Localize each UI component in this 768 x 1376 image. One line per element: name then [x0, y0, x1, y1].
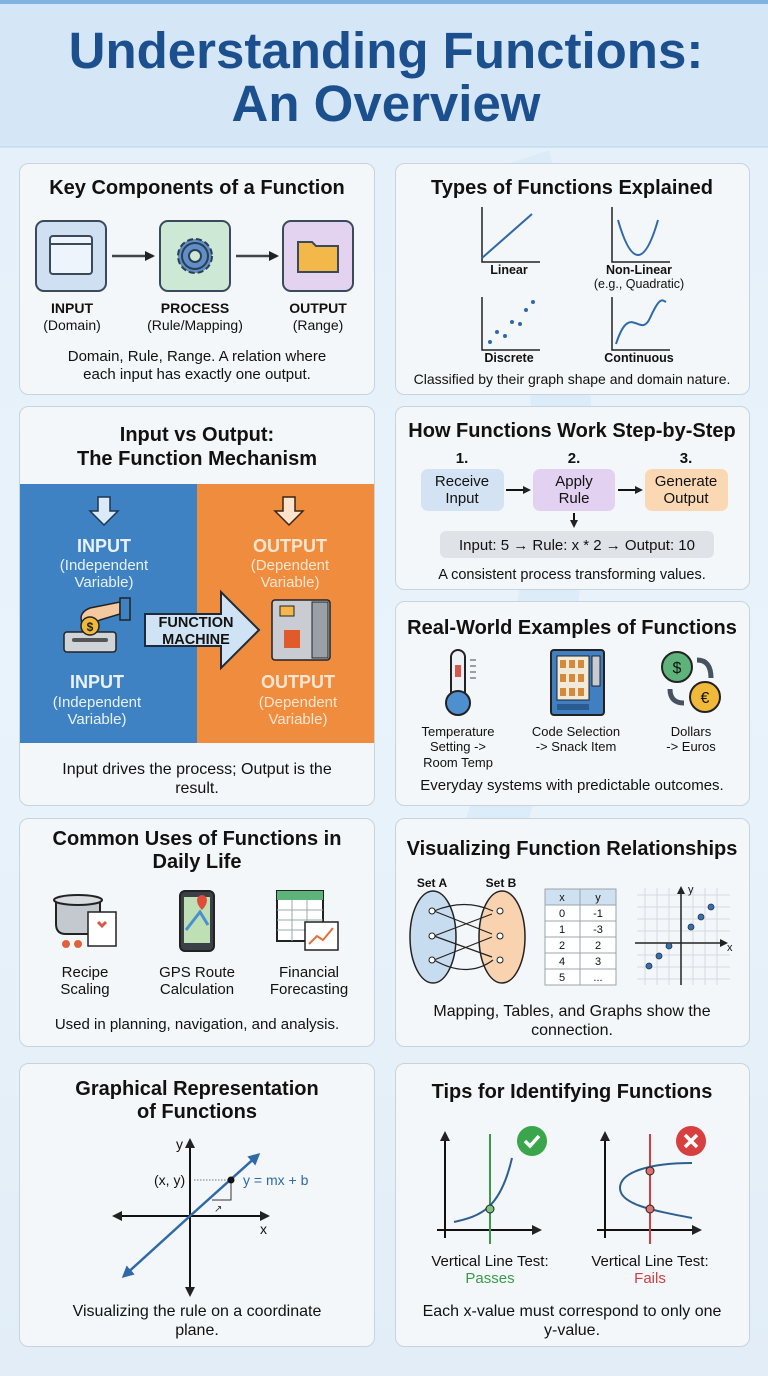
labels: PROCESS [161, 300, 229, 316]
labels: -> Euros [666, 739, 716, 754]
panel: common uses [20, 818, 374, 1046]
description: Each x-value must correspond to only one [423, 1303, 722, 1320]
arrow [236, 255, 277, 257]
panel: tips [396, 1064, 750, 1346]
icon: vending/coffee machine [272, 600, 330, 660]
steps: Input [445, 490, 480, 507]
labels: -> Snack Item [536, 739, 616, 754]
heading: Graphical Representation [75, 1078, 319, 1100]
output half [197, 484, 374, 743]
output half: Variable) [261, 574, 319, 591]
chart: fails [597, 1126, 706, 1244]
icon: pot [54, 895, 116, 948]
panel: real-world examples [396, 602, 750, 806]
labels: Room Temp [423, 755, 493, 770]
heading: Visualizing Function Relationships [407, 838, 737, 860]
icon: input window [36, 221, 106, 291]
description: Input drives the process; Output is the [62, 761, 332, 778]
table: 4 [559, 956, 565, 968]
panel: visualizing relationships [396, 818, 750, 1046]
mapping diagram: Set B [486, 876, 517, 890]
mapping diagram: Set A [417, 876, 447, 890]
arrow: function machine: FUNCTION [159, 615, 233, 631]
heading: Real-World Examples of Functions [407, 617, 737, 639]
description: result. [175, 780, 219, 797]
panel: step-by-step [396, 406, 750, 590]
heading: of Functions [137, 1101, 257, 1123]
steps: 1. [456, 450, 468, 467]
steps: 3. [680, 450, 692, 467]
description: A consistent process transforming values. [438, 567, 706, 583]
example box [440, 531, 714, 558]
input half [20, 484, 197, 743]
description [423, 1303, 722, 1339]
icon: phone map [180, 891, 214, 951]
chart: linear [482, 207, 540, 262]
table: -3 [593, 924, 603, 936]
coordinate graph: y [176, 1136, 183, 1152]
output half: (Dependent [251, 557, 330, 574]
example box: Input: 5 → Rule: x * 2 → Output: 10 [459, 537, 695, 554]
labels: Calculation [160, 981, 234, 998]
labels: (Domain) [43, 317, 101, 333]
input half: INPUT [70, 672, 124, 692]
table: 0 [559, 908, 565, 920]
heading: Daily Life [153, 851, 241, 873]
heading: Tips for Identifying Functions [432, 1081, 712, 1103]
scatter graph: x [727, 942, 733, 954]
coordinate graph: x [260, 1221, 267, 1237]
table: 5 [559, 972, 565, 984]
labels: Scaling [60, 981, 110, 998]
panel: graphical representation [20, 1064, 374, 1346]
heading: Common Uses of Functions in [53, 828, 341, 850]
labels: Vertical Line Test: [591, 1253, 709, 1270]
heading: How Functions Work Step-by-Step [408, 420, 736, 442]
labels: OUTPUT [289, 300, 347, 316]
steps: Receive [435, 473, 489, 490]
labels: Code Selection [532, 724, 620, 739]
labels [422, 724, 716, 770]
icon: coin slot hand: $ [87, 620, 94, 634]
chart: quadratic [612, 207, 670, 262]
icon: vending machine [551, 650, 604, 715]
steps [421, 450, 728, 511]
output half: (Dependent [259, 694, 338, 711]
labels: Setting -> [430, 739, 486, 754]
table: 2 [559, 940, 565, 952]
description [62, 761, 332, 797]
labels: Non-Linear [606, 263, 672, 277]
heading [75, 1078, 319, 1123]
output half: Variable) [269, 711, 327, 728]
table: y [595, 892, 601, 904]
panel: key components [20, 164, 374, 394]
table: x [559, 892, 565, 904]
description: Classified by their graph shape and domain nature. [414, 371, 730, 387]
steps: Apply [555, 473, 593, 490]
labels [60, 964, 348, 998]
description [68, 348, 326, 383]
description: Domain, Rule, Range. A relation where [68, 348, 326, 365]
scatter graph [635, 884, 733, 985]
table [545, 889, 616, 985]
input half: Variable) [75, 574, 133, 591]
chart: passes [437, 1126, 547, 1244]
table: -1 [593, 908, 603, 920]
table: ... [593, 972, 603, 984]
labels: Vertical Line Test: [431, 1253, 549, 1270]
coordinate graph: ↗ [214, 1204, 222, 1215]
heading: Input vs Output: [120, 424, 274, 446]
heading: Types of Functions Explained [431, 177, 713, 199]
subtitle line: An Overview [232, 75, 541, 132]
description: each input has exactly one output. [83, 366, 311, 383]
chart: continuous [612, 297, 670, 350]
labels: INPUT [51, 300, 93, 316]
labels: Linear [490, 263, 528, 277]
steps: Rule [559, 490, 589, 507]
labels: (e.g., Quadratic) [594, 277, 684, 291]
coordinate graph: y = mx + b [243, 1172, 309, 1188]
icon: thermometer [446, 650, 476, 715]
labels: Financial [279, 964, 339, 981]
input half: INPUT [77, 536, 131, 556]
table: 3 [595, 956, 601, 968]
description: Used in planning, navigation, and analysis. [55, 1016, 339, 1033]
description: y-value. [544, 1322, 600, 1339]
labels: Continuous [604, 351, 674, 365]
description: Mapping, Tables, and Graphs show the [433, 1003, 711, 1020]
icon: output folder [283, 221, 353, 291]
steps: Output [663, 490, 709, 507]
description: connection. [531, 1022, 613, 1039]
input half: (Independent [60, 557, 149, 574]
output half: OUTPUT [253, 536, 327, 556]
heading [53, 828, 341, 873]
chart: discrete [482, 297, 540, 350]
icon: currency exchange: € [701, 690, 710, 707]
labels: Fails [634, 1270, 666, 1287]
title: Understanding Functions: [69, 22, 703, 79]
labels: (Range) [293, 317, 343, 333]
panel: types of functions [396, 164, 750, 394]
coordinate graph [114, 1136, 309, 1295]
heading: Key Components of a Function [49, 177, 345, 199]
labels: Forecasting [270, 981, 348, 998]
labels: GPS Route [159, 964, 235, 981]
labels [43, 300, 347, 333]
icon: spreadsheet [277, 891, 338, 950]
heading: The Function Mechanism [77, 448, 317, 470]
panel: input vs output [20, 406, 374, 806]
steps: Generate [655, 473, 717, 490]
icon: coin slot hand [64, 598, 130, 652]
description [433, 1003, 711, 1039]
title band [0, 0, 768, 147]
labels: Dollars [671, 724, 712, 739]
description: Visualizing the rule on a coordinate [73, 1303, 321, 1320]
labels [484, 263, 684, 365]
labels: Recipe [62, 964, 108, 981]
description: plane. [175, 1322, 219, 1339]
icon: currency exchange: $ [673, 660, 682, 677]
heading [77, 424, 317, 470]
labels [431, 1253, 709, 1287]
description: Everyday systems with predictable outcomes. [420, 777, 724, 794]
icon: process gear [160, 221, 230, 291]
mapping diagram [410, 876, 525, 983]
arrows [506, 490, 641, 526]
scatter graph: y [688, 884, 694, 896]
arrow: function machine [145, 592, 259, 668]
coordinate graph: (x, y) [154, 1172, 185, 1188]
labels: Discrete [484, 351, 534, 365]
steps: 2. [568, 450, 580, 467]
input half: (Independent [53, 694, 142, 711]
arrow [112, 255, 153, 257]
output half: OUTPUT [261, 672, 335, 692]
icon: currency exchange [662, 652, 720, 712]
description [73, 1303, 321, 1339]
table: 1 [559, 924, 565, 936]
arrow: function machine: MACHINE [162, 632, 230, 648]
table: 2 [595, 940, 601, 952]
labels: (Rule/Mapping) [147, 317, 243, 333]
labels: Temperature [422, 724, 494, 739]
input half: Variable) [68, 711, 126, 728]
labels: Passes [465, 1270, 515, 1287]
